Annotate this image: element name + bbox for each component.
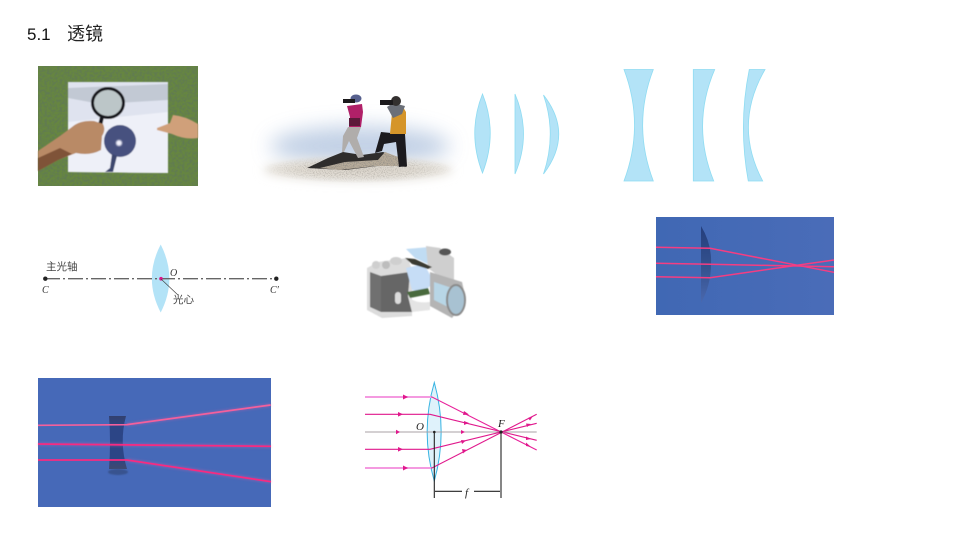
laser rays: [38, 405, 271, 482]
lens edge-on: [109, 416, 127, 469]
lens: plano-concave: [693, 70, 715, 181]
laser glow: [38, 405, 271, 482]
title: 透镜: [67, 24, 103, 44]
photo: two photographers on a rock: [263, 94, 453, 183]
laser rays: [656, 247, 834, 278]
diagram: parallel rays converging at focus F: f: [465, 487, 470, 499]
photo: convex lens converging laser rays: [656, 217, 834, 315]
illustration: camera cutaway: [367, 246, 466, 318]
title: 5.1: [27, 25, 51, 44]
diagram: parallel rays converging at focus F: O: [416, 421, 424, 433]
diagram: principal axis and optical centre: C: [42, 285, 49, 296]
diagram: principal axis and optical centre: C′: [270, 285, 280, 296]
person: right photographer: [375, 96, 407, 167]
left hand: [38, 121, 104, 171]
lens: convex meniscus: [544, 95, 559, 174]
lens: biconvex: [475, 94, 490, 173]
incident and refracted rays: [365, 397, 537, 468]
magnifier: [92, 88, 124, 130]
lens edge-on: [701, 226, 711, 303]
rock: [307, 152, 407, 170]
title: [27, 24, 103, 44]
magnifier shadow: [104, 125, 136, 172]
diagram: parallel rays converging at focus F: F: [497, 418, 505, 430]
diagram: principal axis and optical centre: 光心: [173, 293, 194, 306]
lens: plano-convex: [515, 94, 524, 174]
arrowheads: [396, 394, 533, 470]
lens: biconcave: [624, 70, 653, 181]
lens: [427, 382, 441, 481]
diagram: principal axis and optical centre: O: [170, 268, 177, 279]
lens: concave meniscus: [743, 70, 765, 181]
right hand: [157, 115, 198, 138]
diagram: principal axis and optical centre: 主光轴: [46, 260, 78, 273]
focal length dimension: [434, 432, 501, 498]
photo: concave lens diverging laser rays: [38, 378, 271, 507]
diagram: parallel rays converging at focus F: [365, 382, 537, 499]
person: left photographer: [342, 94, 364, 158]
photo: magnifier focusing sunlight on paper: [38, 66, 198, 186]
diagram: principal axis and optical centre: [42, 244, 280, 312]
